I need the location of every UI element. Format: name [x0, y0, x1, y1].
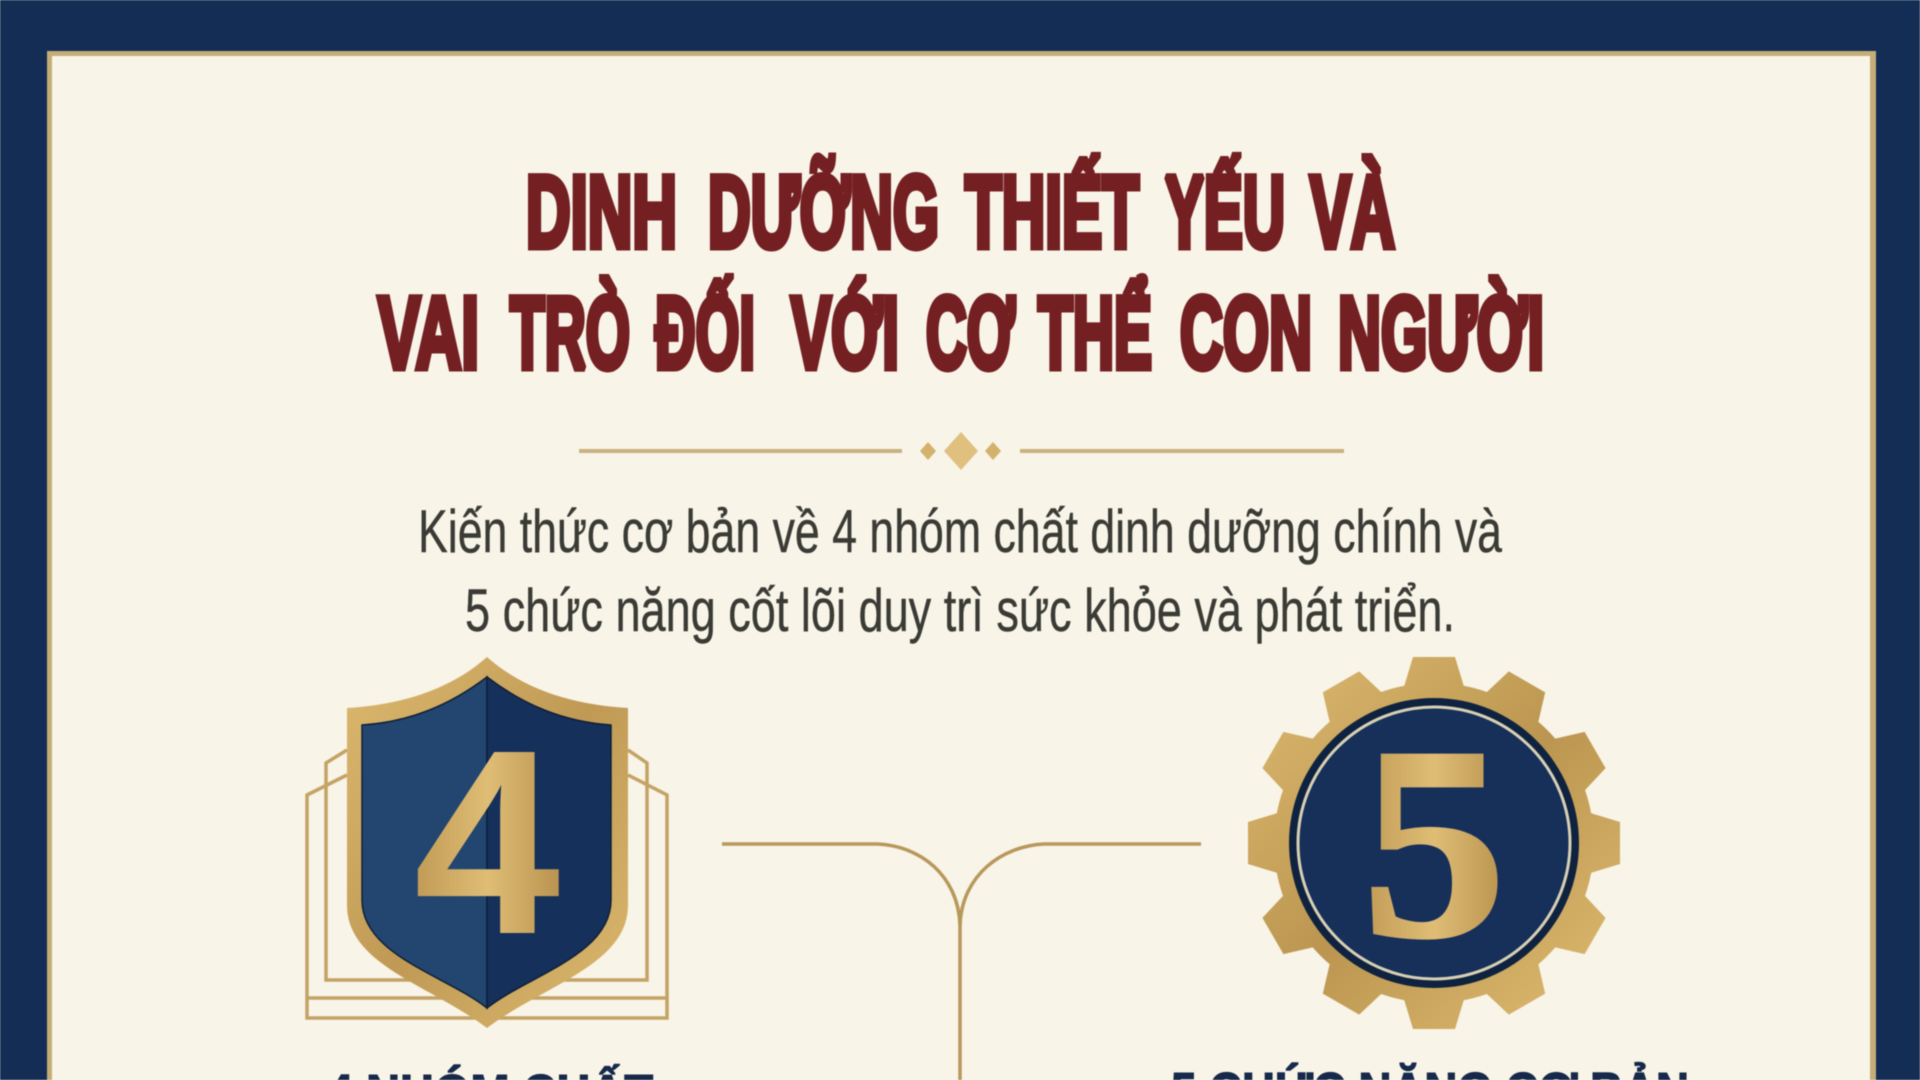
title: THỂ [1038, 276, 1152, 390]
icon: gear badge with number 5 [1240, 650, 1628, 1038]
title: THIẾT [965, 155, 1139, 269]
title: VÀ [1310, 155, 1395, 269]
divider with diamonds [579, 432, 1344, 470]
title: ĐỐI [655, 276, 755, 390]
icon: open book behind shield [307, 750, 667, 1018]
title [378, 155, 1544, 390]
title: VỚI [791, 276, 899, 390]
icon: shield badge with number 4 [347, 657, 628, 1028]
connector lines between badges [722, 844, 1201, 1080]
number 4: 4 [414, 695, 562, 989]
subtitle: 5 chức năng cốt lõi duy trì sức khỏe và phát triển. [465, 577, 1455, 644]
title: DINH [526, 155, 677, 269]
subtitle [418, 498, 1502, 644]
title: CƠ [926, 276, 1015, 390]
title: CON [1180, 276, 1312, 390]
title: NGƯỜI [1338, 276, 1544, 390]
subtitle: Kiến thức cơ bản về 4 nhóm chất dinh dưỡng chính và [418, 498, 1502, 565]
title: VAI [378, 276, 479, 390]
title: TRÒ [510, 276, 630, 390]
title: DƯỠNG [708, 155, 939, 269]
title: YẾU [1165, 155, 1285, 269]
number 5: 5 [1362, 692, 1506, 995]
